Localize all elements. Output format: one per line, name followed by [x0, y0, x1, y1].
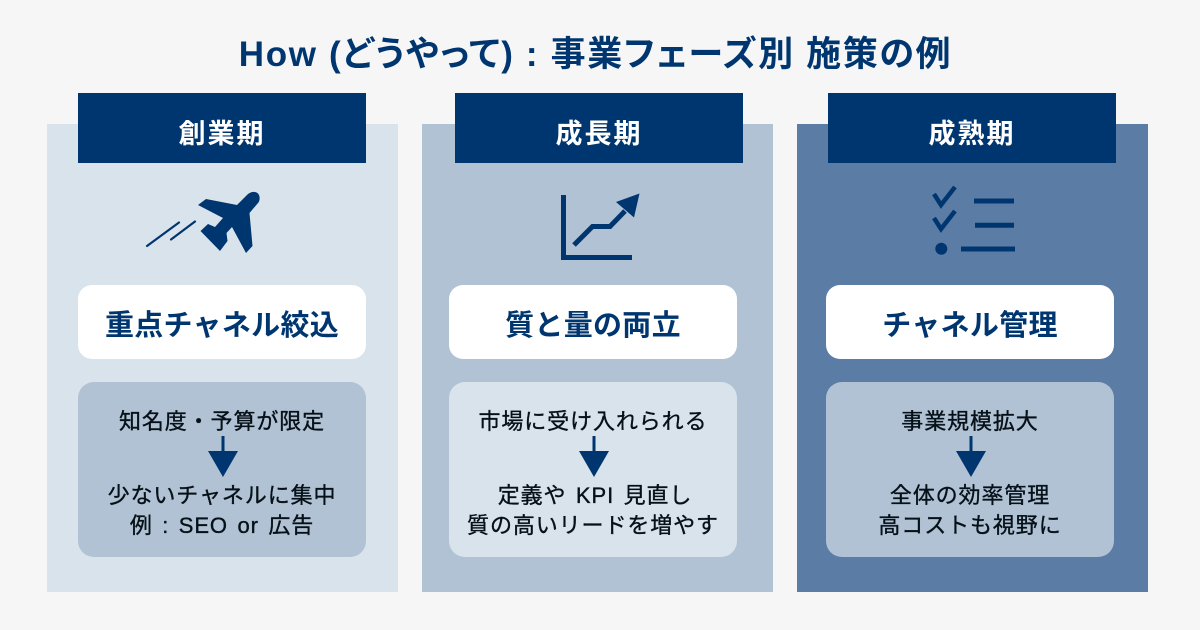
text: 事業規模拡大: 事業規模拡大: [901, 409, 1039, 434]
text: 定義や KPI 見直し 質の高いリードを増やす: 質の高いリードを増やす: [467, 513, 719, 538]
label: 重点チャネル絞込: [78, 285, 366, 359]
text: 全体の効率管理 高コストも視野に: [878, 483, 1062, 538]
text: 全体の効率管理 高コストも視野に: 高コストも視野に: [878, 513, 1062, 538]
heading: 創業期: 創業期: [178, 119, 266, 149]
heading: 創業期: [78, 93, 366, 163]
panel: 創業期: [47, 124, 398, 592]
detail box: 創業期: [78, 382, 366, 557]
arrow: down: [208, 436, 238, 477]
title: How (どうやって) : 事業フェーズ別 施策の例: [239, 35, 952, 74]
label: 質と量の両立: 質と量の両立: [505, 310, 681, 342]
label: 質と量の両立: [449, 285, 737, 359]
text: 全体の効率管理 高コストも視野に: 全体の効率管理: [890, 483, 1050, 508]
label: 重点チャネル絞込: 重点チャネル絞込: [105, 310, 339, 342]
text: 知名度・予算が限定: 知名度・予算が限定: [119, 409, 325, 434]
detail box: 成熟期: [826, 382, 1114, 557]
text: 市場に受け入れられる: 市場に受け入れられる: [478, 409, 708, 434]
arrow: down: [579, 436, 609, 477]
detail box: 成長期: [449, 382, 737, 557]
panel: 成熟期: [797, 124, 1148, 592]
label: チャネル管理: [826, 285, 1114, 359]
heading: 成長期: [455, 93, 743, 163]
label: チャネル管理: チャネル管理: [882, 310, 1058, 342]
icon: airplane: [146, 192, 260, 253]
heading: 成熟期: [828, 93, 1116, 163]
icon: checklist: [932, 186, 1015, 255]
text: 少ないチャネルに集中 例 : SEO or 広告: [108, 483, 336, 538]
text: 少ないチャネルに集中 例 : SEO or 広告: 例 : SEO or 広告: [130, 513, 314, 538]
text: 定義や KPI 見直し 質の高いリードを増やす: 定義や KPI 見直し: [498, 483, 692, 508]
heading: 成熟期: 成熟期: [928, 119, 1016, 149]
arrow: down: [956, 436, 986, 477]
panel: 成長期: [422, 124, 773, 592]
text: 少ないチャネルに集中 例 : SEO or 広告: 少ないチャネルに集中: [108, 483, 336, 508]
icon: growth chart: [561, 194, 640, 260]
heading: 成長期: 成長期: [556, 119, 642, 149]
text: 定義や KPI 見直し 質の高いリードを増やす: [467, 483, 719, 538]
